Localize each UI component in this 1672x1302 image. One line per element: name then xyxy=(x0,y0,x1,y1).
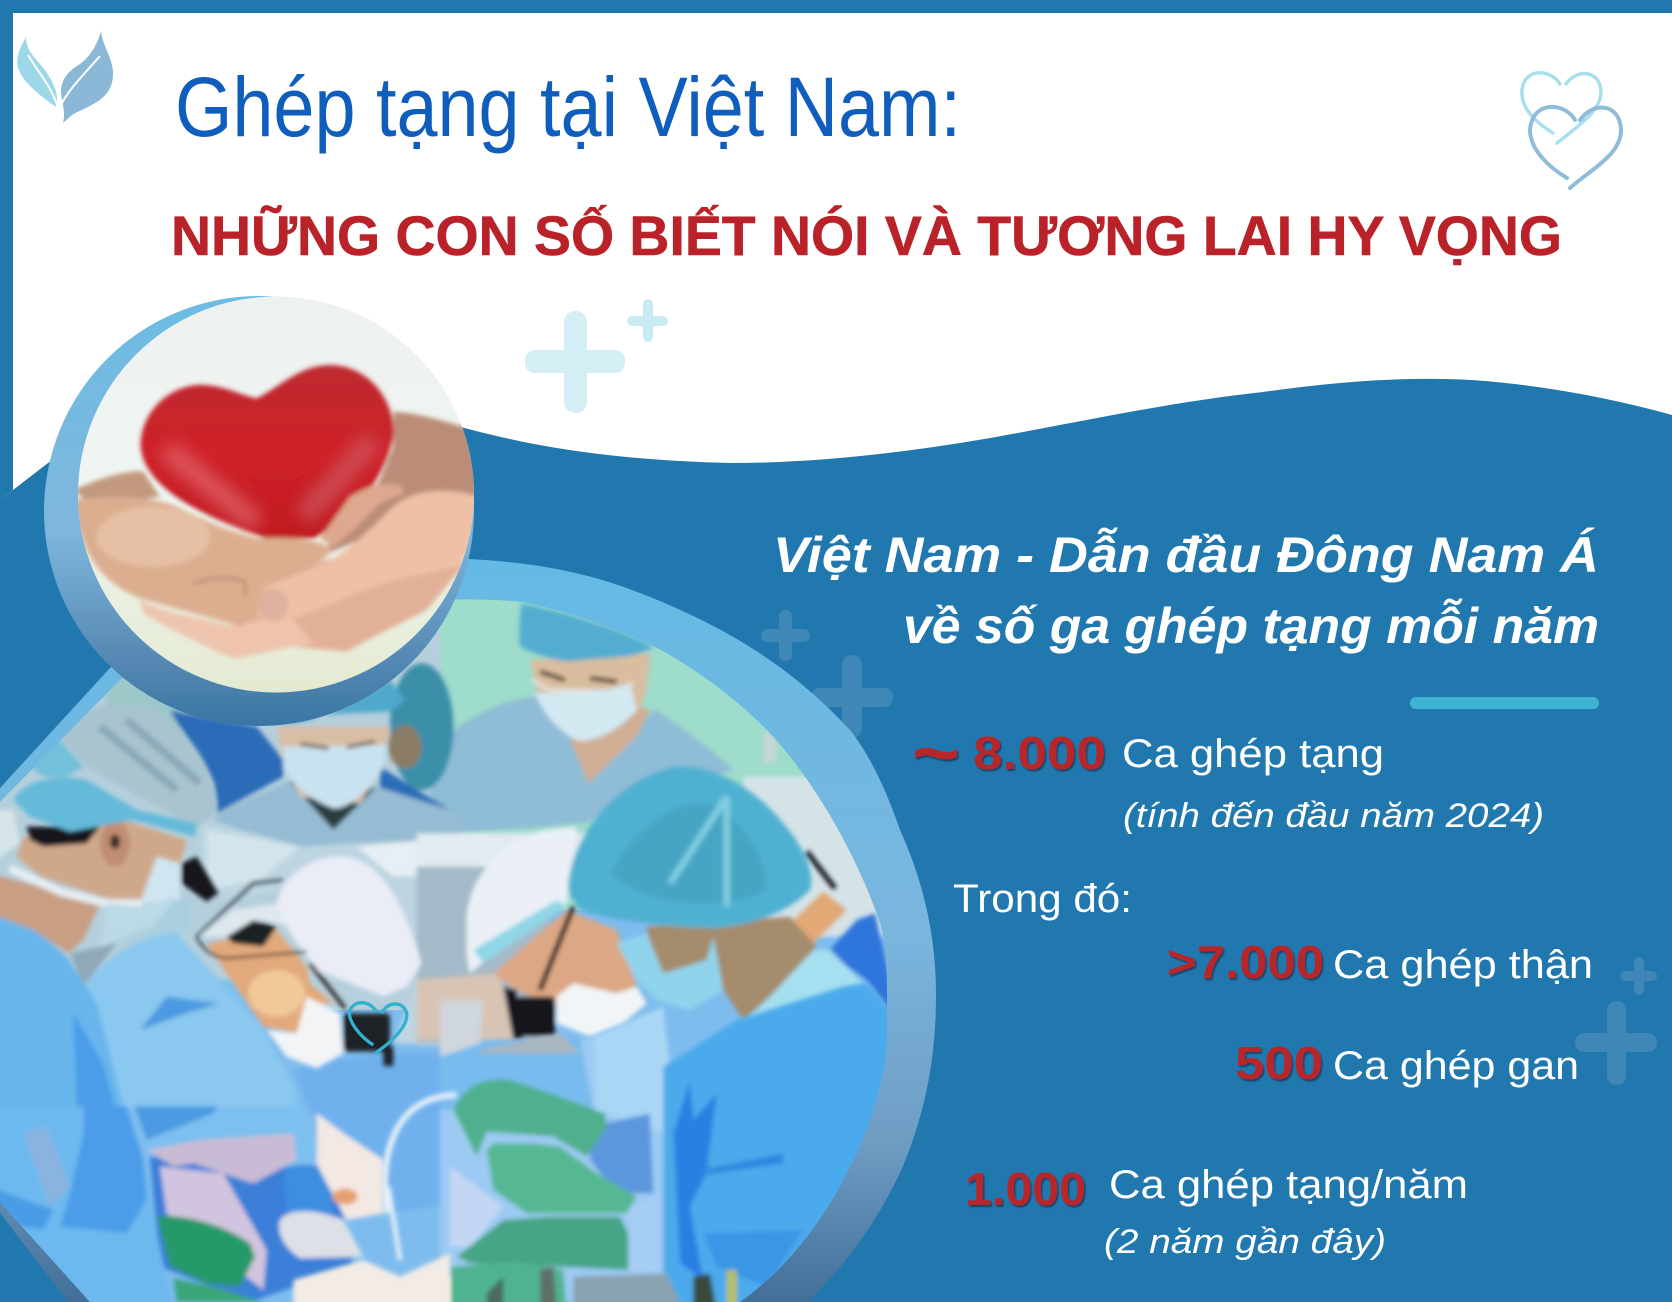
icon: plus decorations top xyxy=(525,299,668,413)
stat: kidney transplants: Ca ghép thận xyxy=(1333,943,1593,987)
surgical tube and operating field xyxy=(293,1095,457,1302)
fist crease xyxy=(193,578,245,597)
back center surgeon, upper left frame xyxy=(107,663,483,1047)
divider bar xyxy=(1410,697,1599,709)
heart photo ring xyxy=(44,296,474,726)
stat: yearly transplants: 1.000 xyxy=(965,1163,1086,1215)
stat: total transplants: (tính đến đầu năm 2024) xyxy=(1123,797,1544,835)
heart in hands photo xyxy=(70,290,480,700)
large gowns and drapes, lower left frame xyxy=(0,980,483,1302)
icon: leaf logo xyxy=(17,31,113,123)
right hand xyxy=(258,491,480,622)
stat: yearly transplants xyxy=(965,1163,1468,1261)
palm fill xyxy=(233,523,473,658)
surgery photo ring xyxy=(0,559,936,1302)
icon: double heart outline xyxy=(1522,73,1621,188)
center left and left surgeons, upper left frame xyxy=(0,704,422,1107)
supporting fingers xyxy=(320,484,403,547)
thumbnail xyxy=(258,589,288,621)
left hand xyxy=(73,497,332,627)
stat: total transplants: Ca ghép tạng xyxy=(1122,732,1384,776)
bottom hand xyxy=(140,600,313,658)
main heading: về số ga ghép tạng mỗi năm xyxy=(903,598,1599,654)
stat: kidney transplants: >7.000 xyxy=(1167,936,1324,988)
blue wave background xyxy=(0,379,1672,1302)
icon: plus decorations on blue xyxy=(761,610,1657,1085)
heart highlights xyxy=(167,450,257,523)
top and left border xyxy=(0,0,1672,500)
title: Ghép tạng tại Việt Nam: xyxy=(175,60,961,154)
stat: total transplants: ~ xyxy=(912,714,960,794)
stat: liver transplants: 500 xyxy=(1235,1037,1323,1089)
plastic sheet and front right surgeon, upper right frame xyxy=(417,767,900,1043)
stat: liver transplants xyxy=(1235,1037,1579,1089)
stat: yearly transplants: Ca ghép tạng/năm xyxy=(1109,1163,1468,1207)
stat: yearly transplants: (2 năm gần đây) xyxy=(1104,1223,1386,1261)
stat: kidney transplants xyxy=(1167,936,1593,988)
surgery photo illustration xyxy=(0,580,900,1302)
right gown, gloves and instruments, lower right frame xyxy=(440,983,900,1302)
main heading: Việt Nam - Dẫn đầu Đông Nam Á xyxy=(773,527,1599,583)
stat: total transplants xyxy=(912,714,1544,835)
small teal heart outline xyxy=(349,1003,407,1053)
subtitle: NHỮNG CON SỐ BIẾT NÓI VÀ TƯƠNG LAI HY VỌNG xyxy=(171,204,1562,267)
back surgeons and surroundings, upper right frame xyxy=(430,603,890,937)
stat: liver transplants: Ca ghép gan xyxy=(1333,1044,1579,1088)
label: of which: Trong đó: xyxy=(953,877,1132,921)
main heading xyxy=(773,527,1599,654)
heart xyxy=(141,365,394,538)
stat: total transplants: 8.000 xyxy=(973,727,1106,779)
upper right hand xyxy=(320,412,480,557)
left hand back fingers xyxy=(73,471,160,507)
left hand highlight xyxy=(97,507,210,567)
